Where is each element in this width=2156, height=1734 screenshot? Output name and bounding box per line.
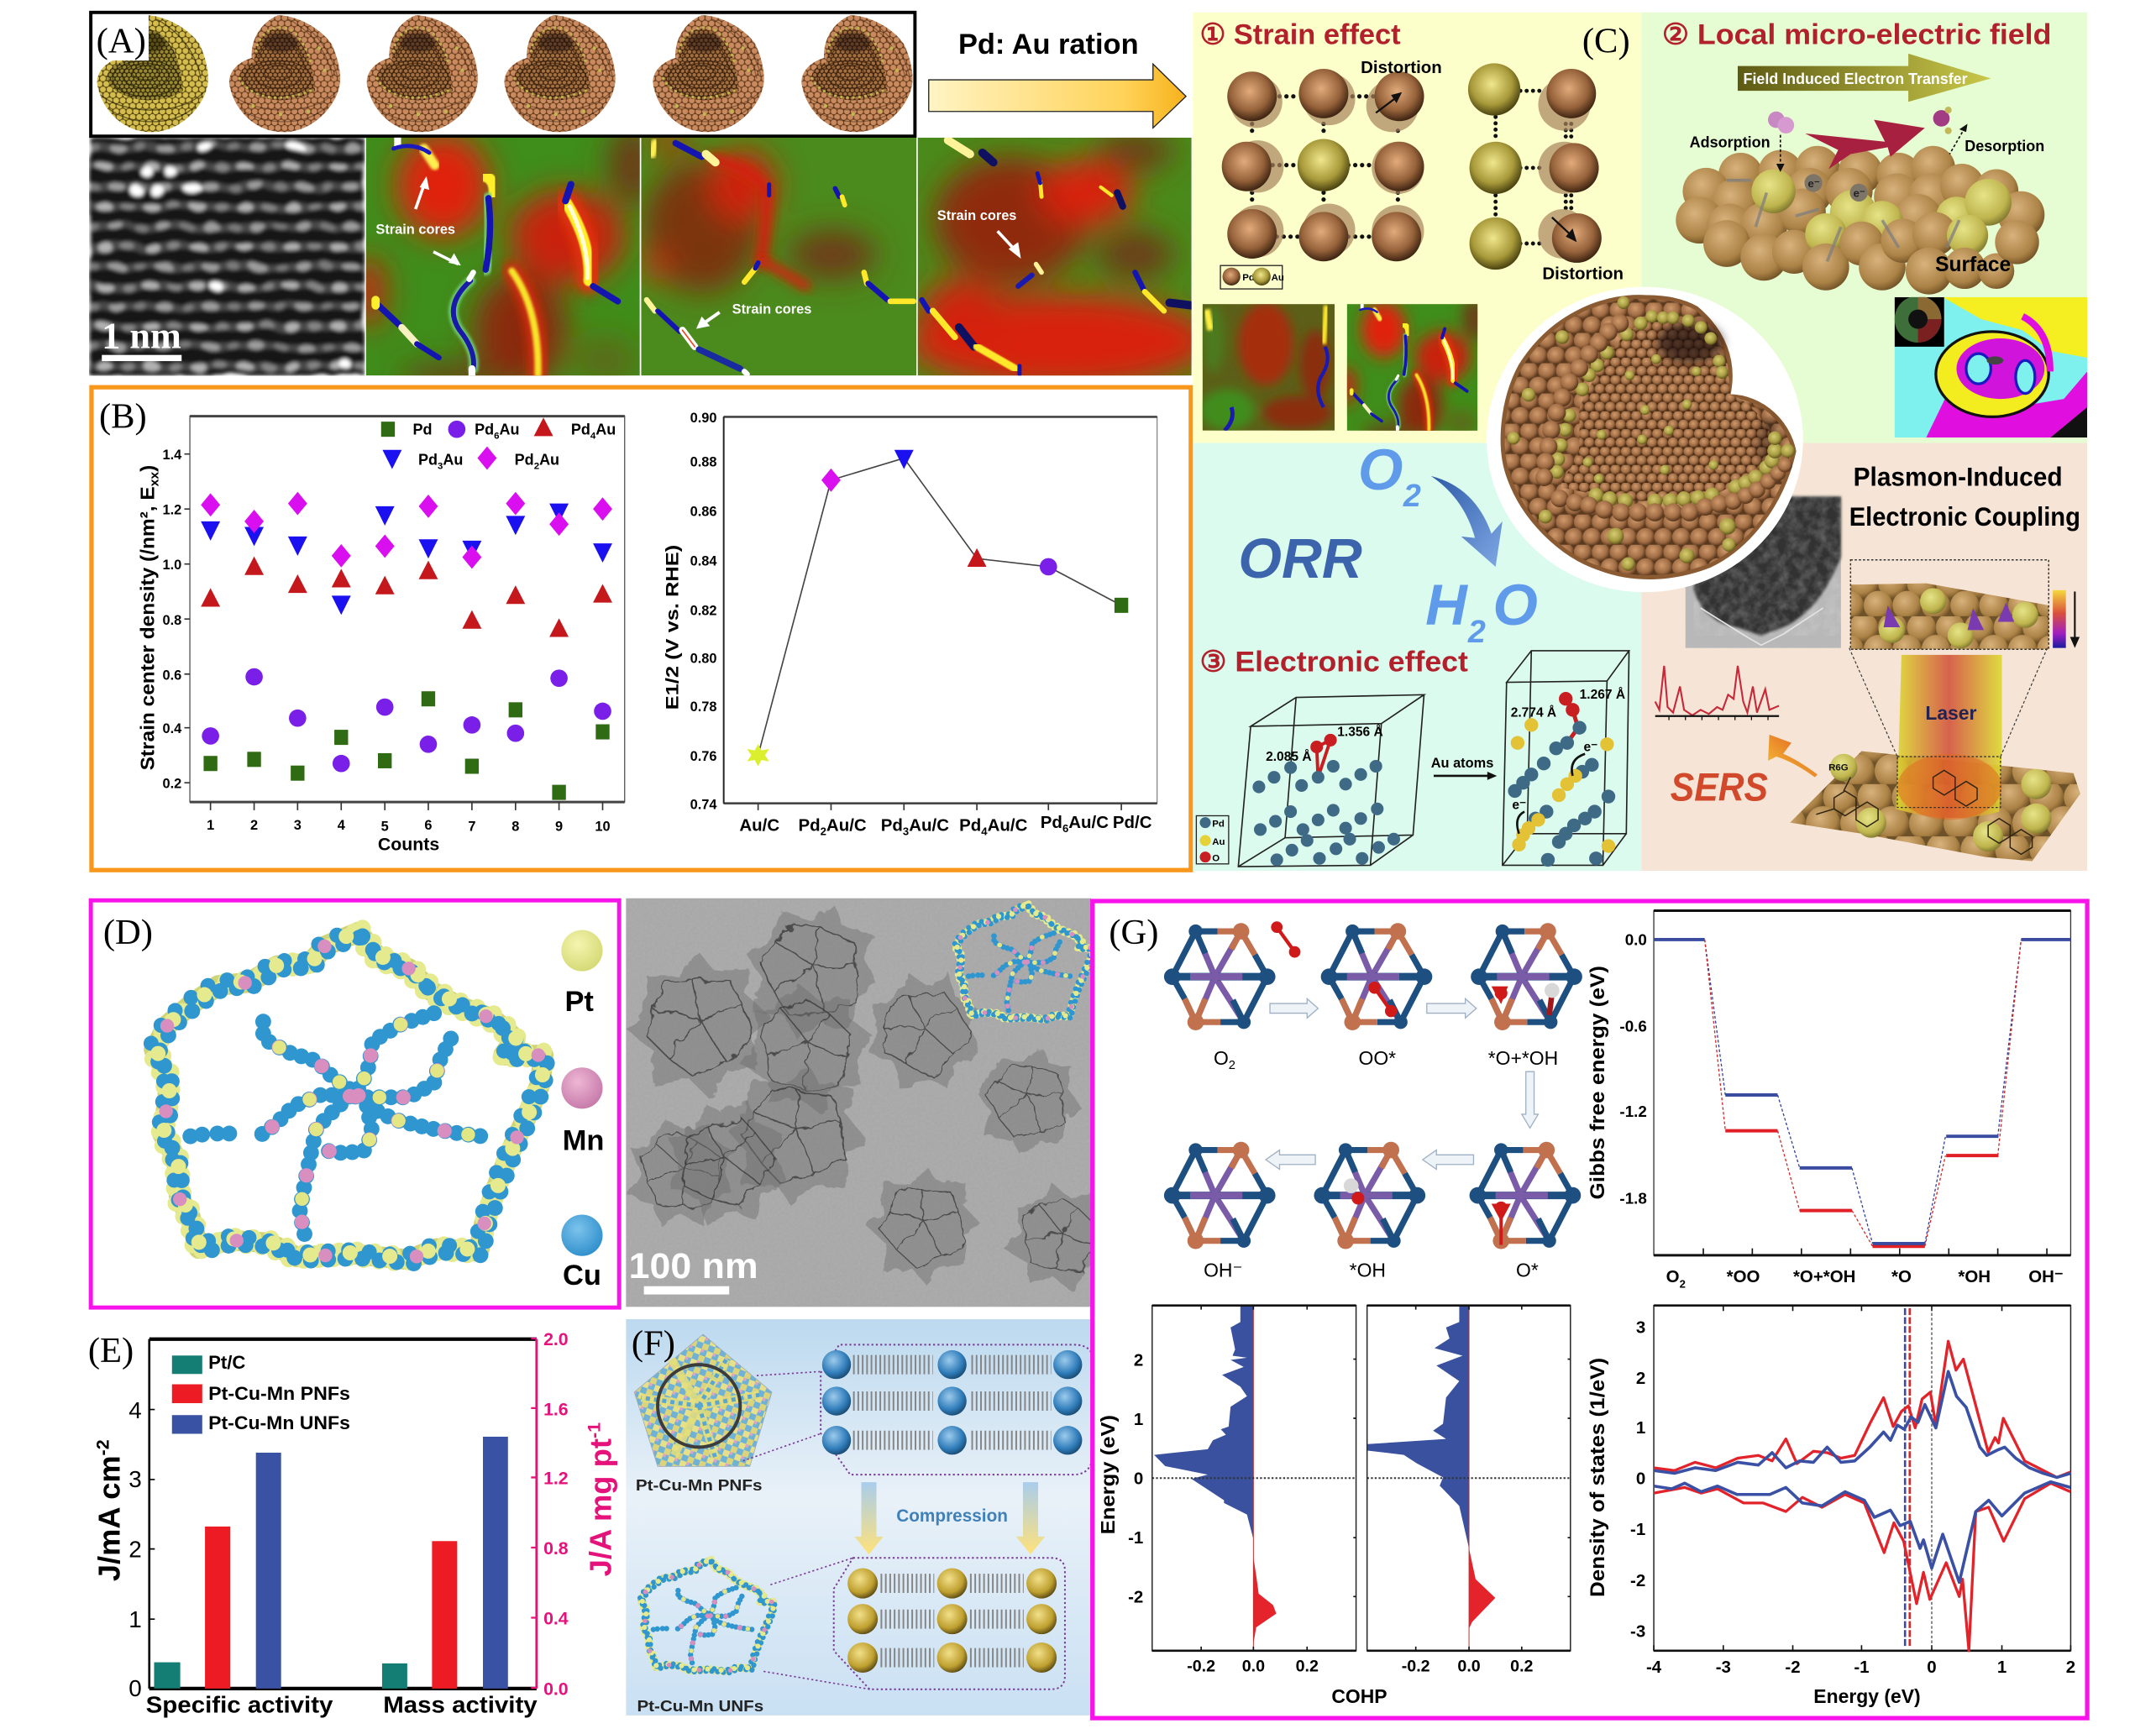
background quadrant: plasmon — [1641, 443, 2087, 871]
density of states plot — [1587, 1306, 2075, 1707]
expanded lattice box — [743, 1344, 1091, 1475]
y ticks: -1.2 — [1619, 1103, 1647, 1120]
crystal model after Au atoms: 2.774 Å — [1511, 706, 1556, 720]
step *O+*OH — [1471, 923, 1582, 1069]
thumbnail strain map 1 — [1199, 302, 1335, 431]
PNF label: Pt-Cu-Mn PNFs — [636, 1477, 763, 1494]
x ticks: 0.2 — [1296, 1657, 1319, 1675]
gold rim atoms — [1507, 296, 1795, 571]
surface atoms model — [1676, 146, 2044, 295]
text: O2: 2 — [1403, 478, 1421, 513]
series Pd2Au — [201, 492, 612, 568]
x category labels: Au/C — [988, 815, 1028, 835]
text: ORR: ORR — [1238, 527, 1362, 590]
panel G: ORR pathway and electronic structure — [1093, 901, 2087, 1718]
right axis ticks: 0.4 — [543, 1609, 569, 1629]
y ticks: 3 — [1636, 1318, 1645, 1337]
y ticks: -1 — [1128, 1528, 1143, 1548]
R6G molecules: R6G — [1828, 762, 1849, 773]
step O*: O* — [1516, 1259, 1539, 1281]
panel C: four mechanisms around the central shell — [1193, 13, 2087, 871]
y ticks: 2 — [1636, 1369, 1645, 1388]
y ticks: -2 — [1128, 1588, 1143, 1607]
x ticks: 0.0 — [1457, 1657, 1481, 1675]
image: TEM particle — [1686, 496, 1841, 648]
COHP axis title: COHP — [1331, 1685, 1387, 1707]
UNF nanoframe — [640, 1559, 774, 1673]
blue spin curves — [1654, 1371, 2070, 1582]
x category labels: OH⁻ — [2028, 1267, 2064, 1286]
left axis ticks: 3 — [129, 1466, 142, 1492]
thumbnail strain map 2 — [1347, 304, 1478, 431]
x ticks: 2 — [2066, 1658, 2075, 1677]
strain map 2: Strain cores — [732, 302, 811, 317]
legend: Pd Au O: Pd — [1212, 820, 1225, 830]
step O2: O — [1214, 1047, 1229, 1069]
legend: Mn: Mn — [563, 1125, 604, 1157]
legend: Pd — [475, 422, 494, 438]
x category labels: Pd — [798, 815, 821, 835]
y tick labels: 0.86 — [690, 504, 716, 519]
panel label E: (E) — [88, 1331, 134, 1370]
cycle arrows — [1266, 998, 1538, 1169]
x axis title: Counts — [378, 834, 439, 854]
R6G molecules — [1816, 762, 2033, 854]
legend: 3 — [438, 462, 443, 472]
y tick labels: 1.4 — [162, 448, 182, 463]
left axis ticks: 4 — [129, 1397, 142, 1423]
heading: local micro-electric field: ② Local micro-electric field — [1662, 18, 2051, 50]
color scale — [2053, 590, 2080, 648]
left axis title: -2 — [92, 1439, 113, 1455]
step O2: 2 — [1229, 1059, 1235, 1072]
step O2 — [1164, 921, 1300, 1072]
right axis title: -1 — [584, 1422, 604, 1438]
adsorption and desorption — [1690, 107, 2044, 172]
x tick labels — [207, 818, 611, 834]
text: O2 — [1358, 437, 1421, 513]
surface atoms model: Surface — [1935, 254, 2011, 276]
crystal model before Au atoms: 2.085 Å — [1266, 750, 1312, 764]
legend: Pd Au O: Au — [1212, 837, 1225, 847]
x category labels — [1666, 1267, 2064, 1290]
lattice diagram right — [1468, 63, 1624, 284]
y tick labels: 0.2 — [162, 777, 181, 792]
panel E: activity bar chart — [88, 1329, 617, 1718]
central shell model — [1487, 287, 1803, 592]
right axis ticks — [543, 1329, 569, 1699]
legend: 4 — [590, 432, 596, 442]
icon: Pd-Au shell 2 — [367, 15, 478, 132]
legend: Au — [595, 422, 616, 438]
right axis ticks: 2.0 — [543, 1329, 569, 1349]
panel B: strain density and half-wave potential — [92, 387, 1191, 870]
y tick labels: 0.90 — [690, 411, 716, 426]
panel label C: (C) — [1582, 21, 1630, 60]
x ticks: -3 — [1716, 1658, 1731, 1677]
y ticks: 1 — [1134, 1410, 1143, 1429]
x category labels: *O — [1891, 1267, 1912, 1286]
x ticks — [1646, 1658, 2075, 1677]
y tick labels: 0.8 — [162, 613, 181, 628]
y axis title: Strain center density (/nm², E — [136, 504, 158, 770]
y axis title: Density of states (1/eV) — [1587, 1358, 1609, 1597]
step *OH: *OH — [1350, 1259, 1386, 1281]
adsorption and desorption: Adsorption — [1690, 134, 1770, 150]
strain map 1 — [366, 138, 640, 376]
category labels: Specific activity — [146, 1692, 333, 1718]
legend: Pd — [571, 422, 590, 438]
left axis ticks: 0 — [129, 1675, 142, 1701]
heading: Pd Au ratio: Pd: Au ration — [958, 29, 1139, 60]
legend — [381, 417, 616, 472]
y ticks: -0.6 — [1619, 1018, 1647, 1035]
COHP plot 1 — [1097, 1306, 1356, 1675]
x axis title: Energy (eV) — [1813, 1685, 1921, 1707]
crystal model after Au atoms: e⁻ — [1584, 740, 1597, 754]
y tick labels: 0.82 — [690, 603, 716, 618]
strain map 1: Strain cores — [375, 223, 455, 238]
y tick labels: 0.84 — [690, 553, 717, 568]
arrow: field induced electron transfer — [1738, 54, 1991, 102]
legend: Mn — [561, 1067, 604, 1157]
y ticks: 1 — [1636, 1418, 1645, 1438]
lattice diagram right: Distortion — [1542, 265, 1624, 284]
arrow: Au atoms: Au atoms — [1431, 756, 1493, 771]
panel label G: (G) — [1109, 913, 1158, 952]
category labels: Mass activity — [383, 1692, 538, 1718]
x category labels: *OO — [1727, 1267, 1760, 1286]
x category labels: Pd — [1041, 813, 1062, 832]
background quadrant: field — [1641, 13, 2087, 443]
y tick labels — [162, 448, 182, 792]
y ticks: 2 — [1134, 1351, 1143, 1370]
x tick labels: 3 — [294, 818, 302, 833]
image: TEM of nanoframes — [606, 883, 1135, 1312]
compression arrows — [854, 1482, 1045, 1554]
legend: Pd — [515, 452, 534, 469]
text: O2: O — [1358, 437, 1403, 502]
y tick labels: 0.74 — [690, 797, 717, 812]
y ticks — [1619, 930, 1647, 1207]
text: H2O: 2 — [1467, 614, 1486, 649]
legend: Pd Au O — [1196, 815, 1229, 864]
x category labels: Au/C — [739, 815, 779, 835]
x ticks: 0.0 — [1242, 1657, 1265, 1675]
right axis ticks: 0.0 — [543, 1679, 569, 1699]
lattice diagram left: Distortion — [1361, 58, 1442, 77]
x tick labels: 2 — [250, 818, 258, 833]
y axis title: Gibbs free energy (eV) — [1587, 966, 1609, 1200]
left axis ticks — [129, 1397, 142, 1701]
legend: Pd and Au atoms: Au — [1272, 273, 1284, 283]
x category labels: Pd — [959, 815, 981, 835]
legend: Pt/C — [208, 1352, 245, 1373]
series Pd6Au — [202, 668, 611, 773]
energy level connectors — [1705, 940, 2021, 1246]
line chart: half-wave potential — [663, 411, 1157, 837]
legend: Pt-Cu-Mn PNFs — [208, 1383, 350, 1404]
lattice diagram left — [1222, 58, 1442, 261]
text: H2O — [1425, 573, 1538, 649]
red spin curves — [1654, 1341, 2070, 1651]
heading: plasmon-induced electronic coupling — [1849, 462, 2080, 532]
panel label D: (D) — [103, 913, 153, 952]
text: H2O: H — [1425, 573, 1468, 637]
step OO* — [1321, 923, 1432, 1069]
arrow: increasing ratio — [929, 64, 1186, 128]
left axis ticks: 2 — [129, 1536, 142, 1562]
PNF pentagon — [634, 1334, 772, 1466]
x category labels: Au/C — [1068, 813, 1109, 832]
surface atoms model: e⁻ — [1854, 186, 1865, 199]
inset: plasmon hot spots on surface — [1850, 560, 2048, 649]
x category labels: Pd/C — [1113, 813, 1152, 832]
legend: Pd and Au atoms: Pd — [1242, 273, 1255, 283]
y ticks: -1 — [1630, 1520, 1645, 1539]
compression arrows: Compression — [896, 1506, 1008, 1526]
x category labels: Pd — [881, 815, 903, 835]
x tick labels: 4 — [338, 818, 346, 833]
y tick labels: 1.0 — [162, 558, 181, 573]
x ticks: -1 — [1854, 1658, 1870, 1677]
laser beam: Laser — [1925, 702, 1977, 724]
arrow: maroon electron path — [1805, 120, 1925, 170]
background quadrant: strain — [1193, 13, 1641, 443]
Gibbs free energy diagram — [1587, 911, 2070, 1290]
legend: Pd — [412, 422, 432, 438]
y axis title: E1/2 (V vs. RHE) — [663, 545, 683, 710]
legend: Pd Au O: O — [1212, 854, 1220, 864]
arrow: O2 to H2O — [1431, 476, 1503, 567]
icon: Pd shell 5 — [801, 15, 913, 132]
bars: specific activity — [154, 1453, 281, 1689]
arrow: Au atoms — [1431, 756, 1497, 780]
x category labels: O — [1666, 1267, 1680, 1286]
x category labels: Au/C — [826, 815, 867, 835]
adsorption and desorption: Desorption — [1965, 138, 2044, 155]
data points — [748, 450, 1128, 767]
x tick labels: 7 — [468, 819, 475, 834]
step O* — [1470, 1142, 1581, 1281]
heading: strain effect: ① Strain effect — [1199, 18, 1401, 50]
x category labels: 3 — [903, 825, 909, 837]
strain map 3: Strain cores — [937, 208, 1016, 223]
panel label F: (F) — [632, 1324, 675, 1364]
text: H2O: O — [1492, 573, 1538, 637]
y ticks: -2 — [1630, 1571, 1645, 1590]
legend: Pt — [561, 930, 603, 1018]
y tick labels: 1.2 — [162, 503, 181, 518]
legend: Pd — [418, 452, 438, 469]
y ticks: -3 — [1630, 1621, 1645, 1641]
panel D: Pt-Cu-Mn nanoframe model — [91, 900, 619, 1307]
legend: Au — [443, 452, 463, 469]
y ticks: 0 — [1134, 1469, 1143, 1489]
x category labels: *OH — [1958, 1267, 1991, 1286]
y tick labels: 0.4 — [162, 721, 182, 736]
crystal model before Au atoms — [1238, 694, 1424, 867]
y axis title: ) — [136, 465, 158, 472]
left axis title: J/mA cm — [92, 1456, 127, 1581]
image: atomic resolution lattice: 1 nm — [102, 316, 181, 357]
icon: gold Au shell — [97, 15, 208, 132]
image: atomic resolution lattice — [89, 138, 365, 375]
panel F: compression schematic — [626, 1319, 1093, 1716]
x category labels: *O+*OH — [1793, 1267, 1855, 1286]
right axis ticks: 1.2 — [543, 1469, 569, 1489]
x ticks — [1187, 1657, 1319, 1675]
left axis ticks: 1 — [129, 1606, 142, 1632]
bars: mass activity — [382, 1437, 508, 1689]
compressed lattice box — [763, 1558, 1065, 1689]
legend: Au — [500, 422, 520, 438]
nanoframe bead model — [150, 928, 548, 1264]
x tick labels: 10 — [595, 819, 611, 834]
x ticks: -2 — [1785, 1658, 1801, 1677]
step *OH — [1314, 1142, 1425, 1281]
x tick labels: 5 — [381, 819, 389, 834]
panel label A: (A) — [97, 21, 146, 60]
legend: 6 — [494, 432, 500, 442]
energy levels — [1654, 940, 2070, 1246]
x category labels: 2 — [1680, 1277, 1686, 1290]
step OH-: OH⁻ — [1204, 1259, 1243, 1281]
background quadrant: electronic — [1193, 443, 1641, 871]
y ticks: 0 — [1636, 1469, 1645, 1489]
arrow: SERS signal — [1768, 735, 1818, 778]
x tick labels: 1 — [207, 818, 214, 833]
UNF label: Pt-Cu-Mn UNFs — [637, 1698, 763, 1715]
heading: electronic effect: ③ Electronic effect — [1199, 646, 1468, 678]
x ticks: -0.2 — [1402, 1657, 1430, 1675]
y tick labels: 0.78 — [690, 699, 716, 715]
laser beam — [1849, 648, 2048, 820]
strain map 2 — [641, 129, 916, 375]
inset nanoframe — [954, 904, 1094, 1021]
icon: Pd-Au shell 3 — [505, 15, 616, 132]
text: SERS: SERS — [1671, 765, 1768, 809]
right axis ticks: 0.8 — [543, 1538, 569, 1559]
y axis title: xx — [148, 471, 161, 486]
catalytic cycle — [1164, 921, 1582, 1281]
panel label B: (B) — [99, 397, 147, 437]
SERS spectrum — [1655, 666, 1779, 720]
icon: Pd-Au shell 1 — [229, 15, 340, 132]
series Pd — [203, 691, 610, 800]
step OO*: OO* — [1359, 1047, 1396, 1069]
surface atoms model: e⁻ — [1808, 177, 1820, 190]
legend: Pd and Au atoms — [1220, 265, 1284, 289]
y tick labels: 0.6 — [162, 668, 181, 683]
crystal model before Au atoms: 1.356 Å — [1337, 725, 1383, 739]
x tick labels: 6 — [424, 818, 433, 833]
category labels — [146, 1692, 538, 1718]
x ticks: 0.2 — [1510, 1657, 1534, 1675]
icon: Pd-Au shell 4 — [653, 15, 764, 132]
y ticks — [1630, 1318, 1645, 1641]
arrow: field induced electron transfer: Field Induced Electron Transfer — [1744, 71, 1968, 87]
y ticks: 0.0 — [1625, 930, 1647, 948]
x tick labels: 9 — [555, 819, 563, 834]
scatter chart: strain center density — [136, 416, 625, 854]
crystal model after Au atoms: 1.267 Å — [1580, 688, 1625, 702]
y tick labels: 0.88 — [690, 454, 716, 469]
y ticks: -1.8 — [1619, 1189, 1647, 1207]
panel A model frame — [91, 13, 915, 136]
y tick labels: 0.76 — [690, 749, 716, 764]
y ticks — [1128, 1351, 1143, 1607]
x tick labels: 8 — [511, 819, 519, 834]
magnetic phase map — [1895, 296, 2087, 440]
panel A: Pd-Au shell models and strain maps — [89, 13, 1211, 392]
step OH- — [1164, 1142, 1276, 1281]
series Pd3Au — [201, 504, 612, 615]
legend: Cu — [561, 1215, 603, 1291]
right axis ticks: 1.6 — [543, 1400, 569, 1420]
legend: Au — [539, 452, 559, 469]
x ticks: -4 — [1646, 1658, 1662, 1677]
x ticks: 1 — [1997, 1658, 2006, 1677]
x category labels — [739, 813, 1152, 837]
series Pd4Au — [201, 557, 612, 637]
y tick labels: 0.80 — [690, 652, 716, 667]
legend: 2 — [534, 462, 539, 472]
x category labels: Au/C — [909, 815, 949, 835]
strain map 3 — [917, 138, 1192, 376]
y tick labels — [690, 411, 717, 812]
x category labels: 4 — [981, 825, 988, 837]
scale bar: 100 nm — [629, 1246, 758, 1286]
legend: Pt: Pt — [564, 986, 594, 1018]
heading: plasmon-induced electronic coupling: Electronic Coupling — [1849, 502, 2080, 532]
step *O+*OH: *O+*OH — [1488, 1047, 1558, 1069]
heading: plasmon-induced electronic coupling: Plasmon-Induced — [1854, 462, 2063, 491]
y axis title: Energy (eV) — [1097, 1415, 1119, 1534]
front rim and crest beads — [1535, 314, 1792, 521]
crystal model after Au atoms — [1503, 651, 1629, 867]
x ticks: 0 — [1927, 1658, 1937, 1677]
legend: Pt-Cu-Mn UNFs — [208, 1412, 350, 1433]
x ticks — [1402, 1657, 1534, 1675]
crystal model after Au atoms: e⁻ — [1512, 798, 1526, 812]
right axis title: J/A mg pt — [583, 1440, 617, 1576]
x ticks: -0.2 — [1187, 1657, 1215, 1675]
substrate atoms for SERS — [1790, 751, 2080, 862]
COHP plot 2 — [1367, 1306, 1571, 1675]
x category labels: 2 — [821, 825, 826, 837]
x category labels: 6 — [1062, 822, 1068, 835]
legend — [172, 1352, 350, 1434]
legend: Cu: Cu — [563, 1260, 601, 1291]
